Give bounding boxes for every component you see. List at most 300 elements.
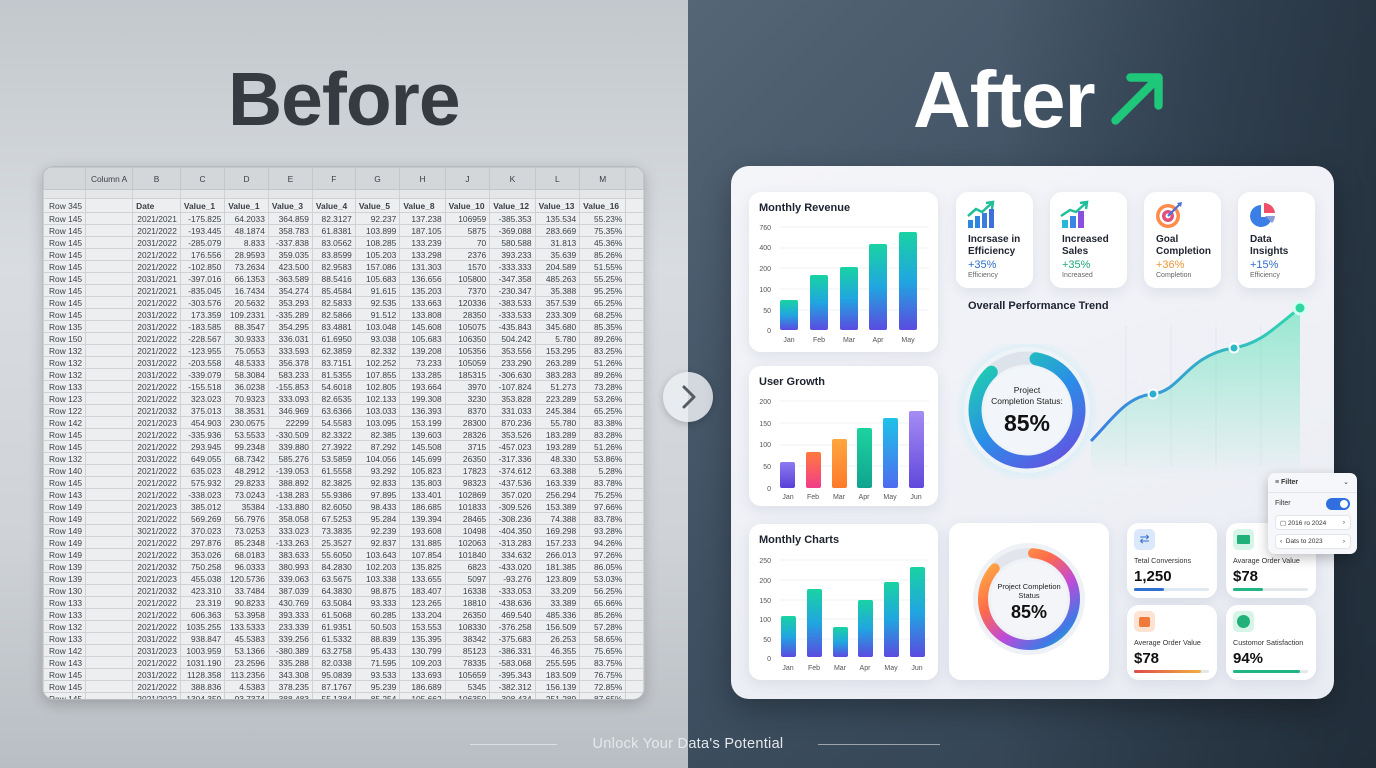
panel: spreadsheet: 870.236 (501, 418, 532, 428)
panel: spreadsheet: 102.203 (366, 562, 396, 572)
panel: spreadsheet: Row 133 (49, 598, 82, 608)
kpi: Data Insights: Insights (1250, 246, 1288, 256)
panel: spreadsheet: 186.689 (411, 682, 442, 692)
panel: spreadsheet: 82.385 (371, 430, 396, 440)
panel: spreadsheet: 4.5383 (239, 682, 265, 692)
panel: spreadsheet: -107.824 (499, 382, 532, 392)
panel: spreadsheet: 635.023 (191, 466, 221, 476)
panel: spreadsheet: 26350 (463, 610, 486, 620)
panel: spreadsheet: 8.833 (244, 238, 265, 248)
panel: spreadsheet: 333.593 (279, 346, 309, 356)
panel: spreadsheet: L (555, 174, 560, 184)
panel: spreadsheet: Value_16 (583, 200, 619, 210)
panel: spreadsheet: Row 145 (49, 298, 82, 308)
panel: spreadsheet: 84.2830 (322, 562, 352, 572)
panel: spreadsheet: 139.603 (411, 430, 442, 440)
panel: spreadsheet: 131.885 (411, 538, 442, 548)
panel: spreadsheet: 17823 (463, 466, 486, 476)
panel: spreadsheet: 89.26% (594, 334, 622, 344)
panel: spreadsheet: 123.809 (546, 574, 576, 584)
panel: spreadsheet: 56.7976 (235, 514, 265, 524)
panel: spreadsheet: 133.239 (411, 238, 442, 248)
panel: spreadsheet: 233.339 (279, 622, 309, 632)
panel: spreadsheet: 89.26% (594, 370, 622, 380)
panel: spreadsheet: -374.612 (499, 466, 532, 476)
panel: spreadsheet: 145.608 (411, 322, 442, 332)
panel: spreadsheet: 230.0575 (230, 418, 265, 428)
panel: spreadsheet: -457.023 (499, 442, 532, 452)
card: Monthly Revenue: 200 (759, 266, 771, 273)
panel: spreadsheet: 297.876 (191, 538, 221, 548)
card: Monthly Charts: Apr (860, 665, 871, 672)
panel: spreadsheet: 108330 (458, 622, 486, 632)
panel: spreadsheet: 83.0562 (322, 238, 352, 248)
gauge: Project Completion Status 85%: Completion Status: (991, 396, 1063, 406)
panel: spreadsheet: Row 145 (49, 262, 82, 272)
panel: spreadsheet: 133.5333 (230, 622, 265, 632)
panel: spreadsheet: 153.295 (546, 346, 576, 356)
kpi: Increased Sales: +35% (1062, 259, 1090, 271)
panel: spreadsheet: 93.333 (371, 598, 396, 608)
panel: spreadsheet: 173.359 (191, 310, 221, 320)
stat card: Customer Satisfaction: 94% (1233, 650, 1263, 667)
card: Project Completion Status donut: 85% (1011, 602, 1047, 622)
panel: spreadsheet: 61.5558 (322, 466, 352, 476)
panel: spreadsheet: 82.3322 (322, 430, 352, 440)
panel: spreadsheet: 51.273 (551, 382, 576, 392)
panel: spreadsheet: 335.288 (279, 658, 309, 668)
panel: spreadsheet (42, 166, 645, 700)
chart: performance trend line (1090, 300, 1308, 466)
card: Project Completion Status donut: Status (1018, 591, 1040, 600)
panel: spreadsheet: 136.393 (411, 406, 442, 416)
panel: spreadsheet: 71.595 (371, 658, 396, 668)
panel: spreadsheet: Row 133 (49, 382, 82, 392)
kpi: Data Insights (1238, 192, 1315, 288)
panel: spreadsheet: -313.283 (499, 538, 532, 548)
panel: spreadsheet: 186.685 (411, 502, 442, 512)
panel: spreadsheet: 82.6050 (322, 502, 352, 512)
panel: spreadsheet: Value_8 (403, 200, 435, 210)
panel: spreadsheet: 1031.190 (186, 658, 221, 668)
panel: spreadsheet: 88.839 (371, 634, 396, 644)
panel: spreadsheet: 255.595 (546, 658, 576, 668)
panel: spreadsheet: 2031/2022 (137, 454, 177, 464)
panel: spreadsheet: 35.388 (551, 286, 576, 296)
panel: spreadsheet: 92.837 (371, 538, 396, 548)
panel: spreadsheet: 105659 (458, 670, 486, 680)
panel: spreadsheet: 1003.959 (186, 646, 221, 656)
panel: spreadsheet: -438.636 (499, 598, 532, 608)
panel: spreadsheet: 157.233 (546, 538, 576, 548)
panel: spreadsheet: 353.026 (191, 550, 221, 560)
panel: spreadsheet: 108.285 (366, 238, 396, 248)
panel: spreadsheet: 55.780 (551, 418, 576, 428)
panel: spreadsheet: 139.208 (411, 346, 442, 356)
kpi: Increased Sales: Increased (1062, 272, 1093, 279)
panel: spreadsheet: 176.556 (191, 250, 221, 260)
panel: spreadsheet: 61.9351 (322, 622, 352, 632)
panel: spreadsheet: 88.5416 (322, 274, 352, 284)
panel: spreadsheet: Row 145 (49, 286, 82, 296)
panel: spreadsheet: 102.805 (366, 382, 396, 392)
panel: spreadsheet: 60.285 (371, 610, 396, 620)
panel: spreadsheet: Row 132 (49, 370, 82, 380)
panel: spreadsheet: 72.85% (594, 682, 622, 692)
panel: spreadsheet: 93.038 (371, 334, 396, 344)
panel: spreadsheet: 585.276 (279, 454, 309, 464)
panel: spreadsheet: 356.378 (279, 358, 309, 368)
panel: spreadsheet: 25.3527 (322, 538, 352, 548)
panel: spreadsheet: Row 143 (49, 658, 82, 668)
title: Before: Before (228, 57, 460, 141)
panel: spreadsheet: 105.683 (366, 274, 396, 284)
panel: spreadsheet: 2021/2022 (137, 298, 177, 308)
panel: spreadsheet: 82.3127 (322, 214, 352, 224)
panel: spreadsheet: 54.6018 (322, 382, 352, 392)
panel: spreadsheet: 48.330 (551, 454, 576, 464)
panel: spreadsheet: -317.336 (499, 454, 532, 464)
panel: spreadsheet: 183.407 (411, 586, 442, 596)
panel: spreadsheet: 85.26% (594, 610, 622, 620)
panel: spreadsheet: 375.013 (191, 406, 221, 416)
panel: spreadsheet: 153.389 (546, 502, 576, 512)
panel: spreadsheet: 105.683 (411, 334, 442, 344)
panel: spreadsheet: -338.023 (188, 490, 221, 500)
kpi: Increase in Efficiency (956, 192, 1033, 288)
panel: spreadsheet: -228.567 (188, 334, 221, 344)
panel: spreadsheet: 423.500 (279, 262, 309, 272)
panel: spreadsheet: 136.656 (411, 274, 442, 284)
panel: spreadsheet: 53.86% (594, 454, 622, 464)
panel: spreadsheet: Column A (91, 174, 127, 184)
panel: spreadsheet: 18810 (463, 598, 486, 608)
title: After: After (913, 55, 1095, 144)
panel: spreadsheet: 48.2912 (235, 466, 265, 476)
panel: spreadsheet: Row 130 (49, 586, 82, 596)
panel: spreadsheet: 2031/2022 (137, 238, 177, 248)
panel: spreadsheet: 81.5355 (322, 370, 352, 380)
panel: spreadsheet: -183.585 (188, 322, 221, 332)
panel: spreadsheet: 65.25% (594, 298, 622, 308)
panel: spreadsheet: 107.855 (366, 370, 396, 380)
panel: spreadsheet: 485.336 (546, 610, 576, 620)
panel: spreadsheet: 2021/2022 (137, 550, 177, 560)
card: Monthly Charts (749, 524, 938, 680)
panel: spreadsheet: 3970 (468, 382, 486, 392)
panel: spreadsheet: 83.4881 (322, 322, 352, 332)
panel: spreadsheet: 27.3922 (322, 442, 352, 452)
panel: spreadsheet: 75.25% (594, 490, 622, 500)
panel: spreadsheet: 45.5383 (235, 634, 265, 644)
card: Monthly Charts: 0 (767, 656, 771, 663)
panel: spreadsheet: 370.023 (191, 526, 221, 536)
panel: spreadsheet: 245.384 (546, 406, 576, 416)
panel: spreadsheet: 133.204 (411, 610, 442, 620)
panel: spreadsheet: 383.633 (279, 550, 309, 560)
panel: spreadsheet: Row 145 (49, 250, 82, 260)
stat card: Average Order Value: Avarage Order Value (1233, 556, 1300, 565)
kpi: Increased Sales: Increased (1062, 234, 1109, 245)
panel: spreadsheet: Row 145 (49, 442, 82, 452)
panel: spreadsheet: 339.256 (279, 634, 309, 644)
icon: target (1156, 202, 1182, 228)
panel: spreadsheet: Row 145 (49, 214, 82, 224)
panel: spreadsheet: 103.899 (366, 226, 396, 236)
panel: spreadsheet: 354.295 (279, 322, 309, 332)
panel: spreadsheet: M (599, 174, 606, 184)
panel: spreadsheet: 92.535 (371, 298, 396, 308)
panel: spreadsheet: Row 345 (49, 200, 82, 210)
panel: spreadsheet: B (154, 174, 159, 184)
card: Monthly Charts: May (884, 665, 898, 672)
panel: spreadsheet: 133.663 (411, 298, 442, 308)
panel: spreadsheet: 55.6050 (322, 550, 352, 560)
panel: spreadsheet: -155.853 (276, 382, 309, 392)
panel: spreadsheet: 73.3835 (322, 526, 352, 536)
panel: spreadsheet: -333.533 (499, 310, 532, 320)
panel: spreadsheet: 5345 (468, 682, 486, 692)
panel: spreadsheet: 28.9593 (235, 250, 265, 260)
card: Monthly Revenue: Apr (873, 337, 884, 344)
panel: spreadsheet: 6823 (468, 562, 486, 572)
panel: spreadsheet: -330.509 (276, 430, 309, 440)
card: Monthly Charts: Mar (834, 665, 847, 672)
panel: spreadsheet: Row 139 (49, 562, 82, 572)
panel: spreadsheet: 33.389 (551, 598, 576, 608)
panel: spreadsheet: 169.298 (546, 526, 576, 536)
panel: spreadsheet: 68.25% (594, 310, 622, 320)
panel: spreadsheet: 135.395 (411, 634, 442, 644)
panel: spreadsheet: 5875 (468, 226, 486, 236)
panel: spreadsheet: 26.253 (551, 634, 576, 644)
panel: spreadsheet: 95.284 (371, 514, 396, 524)
panel: spreadsheet: 83.7151 (322, 358, 352, 368)
filter popup: ▢ 2016 ro 2024 (1280, 520, 1326, 527)
panel: spreadsheet: 74.388 (551, 514, 576, 524)
card: Monthly Charts: 200 (759, 578, 771, 585)
panel: spreadsheet: 105.203 (366, 250, 396, 260)
panel: spreadsheet: 48.1874 (235, 226, 265, 236)
panel: spreadsheet: 388.892 (279, 478, 309, 488)
panel: spreadsheet: 30.9333 (235, 334, 265, 344)
panel: spreadsheet: 649.055 (191, 454, 221, 464)
card: User Growth: May (883, 494, 897, 501)
panel: spreadsheet: 85.2348 (235, 538, 265, 548)
panel: spreadsheet: 105800 (458, 274, 486, 284)
panel: spreadsheet: 63.388 (551, 466, 576, 476)
panel: spreadsheet: 135.203 (411, 286, 442, 296)
panel: spreadsheet: 85.35% (594, 322, 622, 332)
card: Monthly Charts: 100 (759, 617, 771, 624)
panel: spreadsheet: Row 145 (49, 226, 82, 236)
panel: spreadsheet: 3715 (468, 442, 486, 452)
panel: spreadsheet: 102063 (458, 538, 486, 548)
panel: spreadsheet: Row 123 (49, 394, 82, 404)
panel: spreadsheet: -369.088 (499, 226, 532, 236)
panel: spreadsheet: 105.823 (411, 466, 442, 476)
panel: spreadsheet: 31.813 (551, 238, 576, 248)
panel: spreadsheet: 97.895 (371, 490, 396, 500)
panel: spreadsheet: 2031/2021 (137, 274, 177, 284)
panel: spreadsheet: 2021/2023 (137, 418, 177, 428)
panel: spreadsheet: Row 145 (49, 478, 82, 488)
panel: spreadsheet: -138.283 (276, 490, 309, 500)
gauge: Project Completion Status 85%: Project (1014, 385, 1041, 395)
panel: spreadsheet: 36.0238 (235, 382, 265, 392)
card: Monthly Revenue: Monthly Revenue (759, 202, 850, 214)
card: Monthly Revenue: May (901, 337, 915, 344)
panel: spreadsheet: 83.78% (594, 478, 622, 488)
gauge: Project Completion Status 85%: 85% (1004, 410, 1050, 436)
panel: spreadsheet: 3021/2022 (137, 526, 177, 536)
panel: spreadsheet: 353.556 (501, 346, 532, 356)
panel: spreadsheet: 156.509 (546, 622, 576, 632)
panel: spreadsheet: 28350 (463, 310, 486, 320)
kpi: Goal Completion (1144, 192, 1221, 288)
panel: spreadsheet: 2031/2023 (137, 646, 177, 656)
panel: spreadsheet: 2021/2022 (137, 682, 177, 692)
stat card: Average Order Value 2 (1127, 605, 1217, 680)
panel: spreadsheet: 2021/2022 (137, 598, 177, 608)
panel: spreadsheet: 73.0253 (235, 526, 265, 536)
panel: spreadsheet: 55.25% (594, 274, 622, 284)
panel: spreadsheet: 73.233 (416, 358, 442, 368)
card: Monthly Charts: Monthly Charts (759, 534, 839, 546)
panel: spreadsheet: 50.503 (371, 622, 396, 632)
panel: spreadsheet: 103.643 (366, 550, 396, 560)
panel: spreadsheet: 2021/2022 (137, 466, 177, 476)
panel: spreadsheet: G (374, 174, 381, 184)
panel: spreadsheet: -123.955 (188, 346, 221, 356)
panel: spreadsheet: 343.308 (279, 670, 309, 680)
panel: spreadsheet: Row 145 (49, 238, 82, 248)
panel: spreadsheet: -335.289 (276, 310, 309, 320)
panel: spreadsheet: Row 149 (49, 550, 82, 560)
panel: spreadsheet: 85.4584 (322, 286, 352, 296)
panel: spreadsheet: 104.056 (366, 454, 396, 464)
panel: spreadsheet: 357.539 (546, 298, 576, 308)
panel: spreadsheet: 48.5333 (235, 358, 265, 368)
icon: smile (1233, 611, 1254, 632)
panel: spreadsheet: 423.310 (191, 586, 221, 596)
panel: spreadsheet: 64.2033 (235, 214, 265, 224)
panel: spreadsheet: 103.338 (366, 574, 396, 584)
panel: spreadsheet: 65.25% (594, 406, 622, 416)
panel: spreadsheet: 35.639 (551, 250, 576, 260)
panel: spreadsheet: 28326 (463, 430, 486, 440)
panel: spreadsheet: -303.576 (188, 298, 221, 308)
panel: spreadsheet: 938.847 (191, 634, 221, 644)
panel: spreadsheet: 358.058 (279, 514, 309, 524)
panel: spreadsheet: 97.26% (594, 550, 622, 560)
panel: spreadsheet: 145.508 (411, 442, 442, 452)
panel: spreadsheet: -230.347 (499, 286, 532, 296)
panel: spreadsheet: 131.303 (411, 262, 442, 272)
panel: spreadsheet: 333.093 (279, 394, 309, 404)
icon: money (1233, 529, 1254, 550)
panel: spreadsheet: 88.3547 (235, 322, 265, 332)
panel: spreadsheet: 33.209 (551, 586, 576, 596)
panel: spreadsheet: 103.095 (366, 418, 396, 428)
panel: spreadsheet: 75.35% (594, 226, 622, 236)
panel: spreadsheet: 82.6535 (322, 394, 352, 404)
filter popup: ≡ Filter (1275, 479, 1298, 486)
filter popup (1268, 473, 1357, 554)
panel: spreadsheet: -385.353 (499, 214, 532, 224)
panel: spreadsheet: 133.285 (411, 370, 442, 380)
panel: spreadsheet: 2021/2022 (137, 262, 177, 272)
panel: spreadsheet: 293.945 (191, 442, 221, 452)
stat card: Total Conversions: Tetal Conversions (1134, 556, 1191, 565)
panel: spreadsheet: 334.632 (501, 550, 532, 560)
panel: spreadsheet: 38342 (463, 634, 486, 644)
panel: spreadsheet: -380.389 (276, 646, 309, 656)
panel: spreadsheet: 123.265 (411, 598, 442, 608)
panel: spreadsheet: -347.358 (499, 274, 532, 284)
panel: spreadsheet: 54.5583 (322, 418, 352, 428)
filter popup: Filter (1275, 500, 1291, 507)
panel: spreadsheet: Row 149 (49, 502, 82, 512)
panel: spreadsheet: 359.035 (279, 250, 309, 260)
panel: spreadsheet: -383.533 (499, 298, 532, 308)
kpi: Increase in Efficiency: Incrsase in (968, 234, 1020, 245)
panel: spreadsheet: 120.5736 (230, 574, 265, 584)
panel: spreadsheet: 354.274 (279, 286, 309, 296)
panel: spreadsheet: 29.8233 (235, 478, 265, 488)
panel: spreadsheet: 96.0333 (235, 562, 265, 572)
panel: spreadsheet: -339.079 (188, 370, 221, 380)
panel: spreadsheet: Row 145 (49, 310, 82, 320)
panel: spreadsheet: 82.5833 (322, 298, 352, 308)
panel: spreadsheet: 73.0243 (235, 490, 265, 500)
panel: spreadsheet: 2021/2022 (137, 514, 177, 524)
panel: spreadsheet: Row 143 (49, 490, 82, 500)
panel: spreadsheet: 8370 (468, 406, 486, 416)
panel: spreadsheet: 163.339 (546, 478, 576, 488)
panel: spreadsheet: 204.589 (546, 262, 576, 272)
panel: spreadsheet: 5097 (468, 574, 486, 584)
panel: spreadsheet: 2021/2022 (137, 226, 177, 236)
panel: spreadsheet: -386.331 (499, 646, 532, 656)
panel: spreadsheet: 33.7484 (235, 586, 265, 596)
panel: spreadsheet: 133.655 (411, 574, 442, 584)
icon: conversions: ⇄ (1139, 532, 1150, 546)
panel: spreadsheet: -285.079 (188, 238, 221, 248)
panel: spreadsheet: 346.969 (279, 406, 309, 416)
card: User Growth: Mar (833, 494, 846, 501)
kpi: Goal Completion: Completion (1156, 246, 1211, 256)
panel: spreadsheet: 135.534 (546, 214, 576, 224)
panel: spreadsheet: 120336 (458, 298, 486, 308)
panel: spreadsheet: 133.808 (411, 310, 442, 320)
panel: spreadsheet: 2376 (468, 250, 486, 260)
panel: spreadsheet: K (510, 174, 515, 184)
panel: spreadsheet: 1035.255 (186, 622, 221, 632)
kpi: Goal Completion: Completion (1156, 272, 1191, 279)
panel: spreadsheet: 193.608 (411, 526, 442, 536)
panel: spreadsheet: 183.509 (546, 670, 576, 680)
panel: spreadsheet: 1570 (468, 262, 486, 272)
panel: spreadsheet: 504.242 (501, 334, 532, 344)
icon: sales chart (1060, 200, 1088, 228)
panel: spreadsheet: 38.3531 (235, 406, 265, 416)
icon: pie chart (1250, 203, 1275, 227)
panel: spreadsheet: 102869 (458, 490, 486, 500)
panel: spreadsheet: -397.016 (188, 274, 221, 284)
panel: spreadsheet: 2021/2022 (137, 430, 177, 440)
panel: spreadsheet: 233.290 (501, 358, 532, 368)
